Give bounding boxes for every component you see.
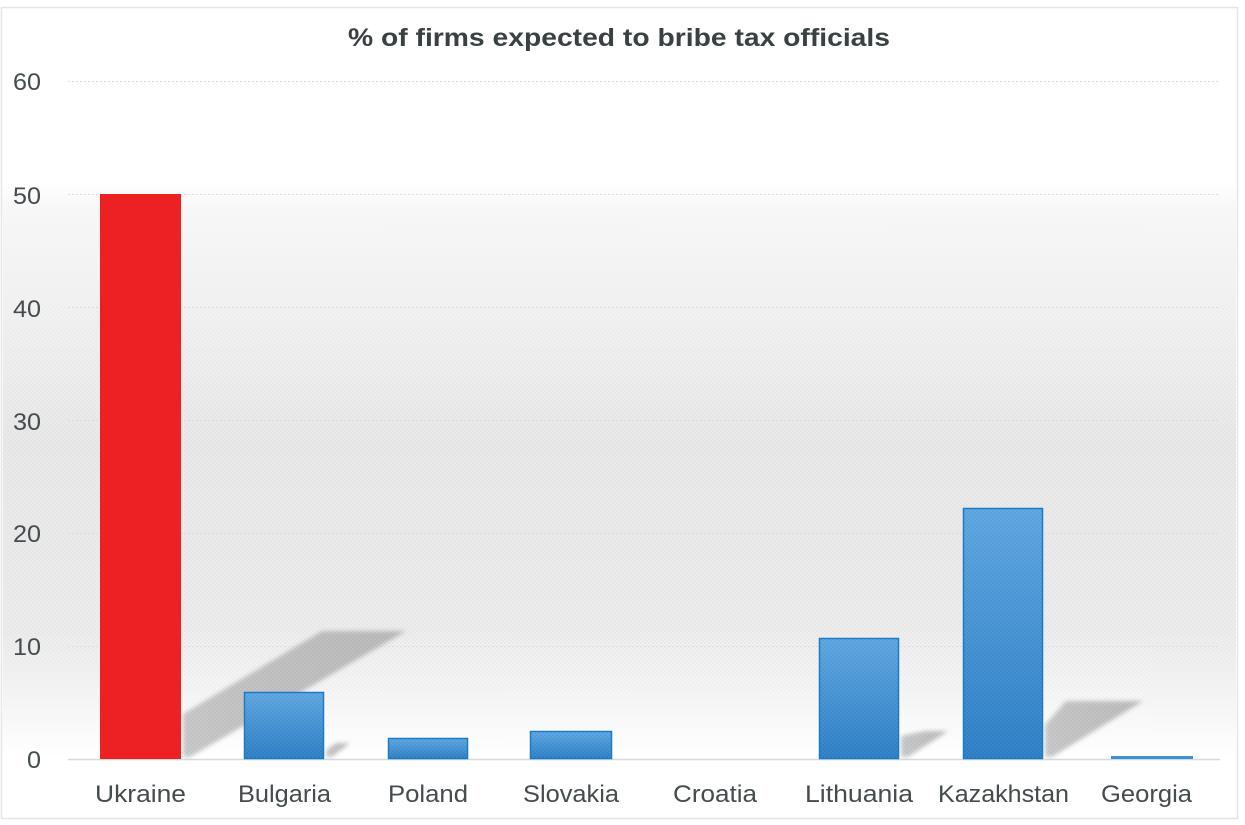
x axis labels: Kazakhstan <box>938 781 1069 808</box>
x axis labels: Croatia <box>673 781 758 808</box>
y axis labels: 60 <box>13 69 41 96</box>
bar: Bulgaria 6 <box>244 692 324 758</box>
chart title: % of firms expected to bribe tax officials <box>348 24 890 52</box>
bar: Ukraine 50 <box>100 194 181 759</box>
x axis labels: Georgia <box>1101 781 1193 808</box>
bar: Kazakhstan 22.3 <box>964 508 1042 758</box>
bar: Lithuania 10.7 <box>820 638 898 758</box>
x axis labels: Lithuania <box>805 781 914 808</box>
x axis labels: Ukraine <box>95 781 186 808</box>
x axis labels: Slovakia <box>523 781 620 808</box>
bar shadows <box>183 631 1143 757</box>
y axis labels: 30 <box>13 409 41 436</box>
shadow dither <box>183 630 1148 758</box>
y axis labels: 20 <box>13 521 41 548</box>
bar: Slovakia 2.5 <box>530 732 612 758</box>
y axis labels: 10 <box>13 634 41 661</box>
y axis labels: 0 <box>27 747 41 774</box>
gridlines and y axis <box>68 82 1220 760</box>
x axis labels <box>95 781 1193 808</box>
y axis labels: 40 <box>13 296 41 323</box>
x axis labels: Bulgaria <box>238 781 332 808</box>
y axis labels: 50 <box>13 183 41 210</box>
bar: Georgia 0.3 <box>1111 756 1193 759</box>
x axis labels: Poland <box>388 781 468 808</box>
y axis labels <box>13 69 41 774</box>
bar: Poland 2 <box>388 738 468 758</box>
